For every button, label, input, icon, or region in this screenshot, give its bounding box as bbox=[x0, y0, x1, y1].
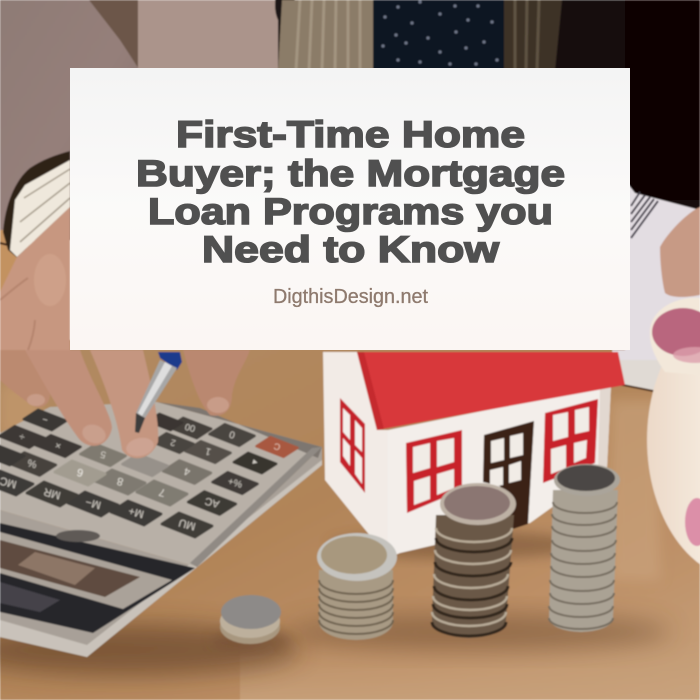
title heading: First-Time Home bbox=[176, 114, 525, 155]
short coin stack bbox=[317, 533, 397, 640]
keys: 6 bbox=[76, 465, 85, 479]
wooden desk bbox=[0, 340, 700, 700]
piggy bank bbox=[647, 298, 700, 580]
dark shirt stripes bbox=[504, 0, 562, 70]
lapel bbox=[89, 0, 150, 80]
pen bbox=[135, 352, 182, 433]
house front wall bbox=[388, 385, 611, 558]
keys: ÷ bbox=[18, 430, 26, 442]
keys: × bbox=[54, 439, 63, 451]
fingers bbox=[0, 350, 250, 459]
wrist, cuff and wood at left edge bbox=[0, 151, 70, 350]
keys: C bbox=[272, 441, 282, 452]
medium coin stack bbox=[432, 483, 516, 638]
title heading: Buyer; the Mortgage bbox=[136, 153, 565, 194]
keys bbox=[0, 410, 298, 537]
display housing bbox=[0, 523, 195, 633]
display frame bbox=[0, 532, 172, 609]
striped cuff bbox=[10, 160, 70, 257]
coin stacks bbox=[212, 464, 620, 650]
keys: − bbox=[41, 414, 49, 425]
keys: 0 bbox=[228, 428, 236, 440]
keys: MR bbox=[42, 485, 62, 501]
site name: DigthisDesign.net bbox=[273, 286, 428, 308]
tie bbox=[373, 0, 504, 70]
business suit background bbox=[0, 0, 700, 240]
shirt bbox=[138, 0, 278, 80]
calculator side bbox=[0, 447, 322, 657]
front window left bbox=[406, 430, 462, 513]
door bbox=[483, 421, 534, 530]
front window right bbox=[543, 399, 598, 483]
keys: 1 bbox=[204, 445, 212, 457]
lower reflection bbox=[0, 582, 60, 612]
house side wall bbox=[323, 352, 388, 558]
single low stack bbox=[212, 595, 292, 650]
keys: M+ bbox=[127, 504, 145, 520]
keys: % bbox=[26, 456, 38, 469]
red roof bbox=[357, 352, 625, 430]
keys: 5 bbox=[99, 448, 107, 460]
title heading: Need to Know bbox=[202, 229, 499, 270]
keys: ◂ bbox=[251, 457, 259, 468]
cuff shadow bbox=[3, 151, 70, 260]
calculator bbox=[0, 402, 322, 657]
display hinge bbox=[56, 530, 100, 542]
keys: AC bbox=[203, 494, 221, 509]
title heading bbox=[136, 114, 565, 270]
calculator top face bbox=[0, 402, 322, 567]
keys: 8 bbox=[116, 474, 125, 488]
title heading: Loan Programs you bbox=[148, 191, 553, 232]
side window bbox=[340, 398, 365, 493]
pig snout bbox=[685, 498, 700, 546]
keys: 2 bbox=[169, 437, 177, 448]
tall coin stack bbox=[549, 464, 620, 632]
keys: M− bbox=[84, 495, 102, 511]
keys: MU bbox=[177, 516, 197, 532]
paper house bbox=[323, 352, 625, 559]
keys: %+ bbox=[227, 475, 244, 489]
striped shirt placket bbox=[278, 0, 373, 70]
title panel bbox=[70, 68, 630, 350]
keys: 4 bbox=[183, 465, 192, 477]
keys: 00 bbox=[184, 421, 196, 434]
keys: 7 bbox=[158, 485, 167, 499]
jacket bbox=[0, 0, 150, 240]
display glass bbox=[0, 540, 140, 597]
wrist bbox=[0, 207, 70, 350]
spiral notebook bbox=[612, 180, 700, 400]
right hand bbox=[660, 207, 700, 297]
pig ear bbox=[650, 298, 700, 375]
